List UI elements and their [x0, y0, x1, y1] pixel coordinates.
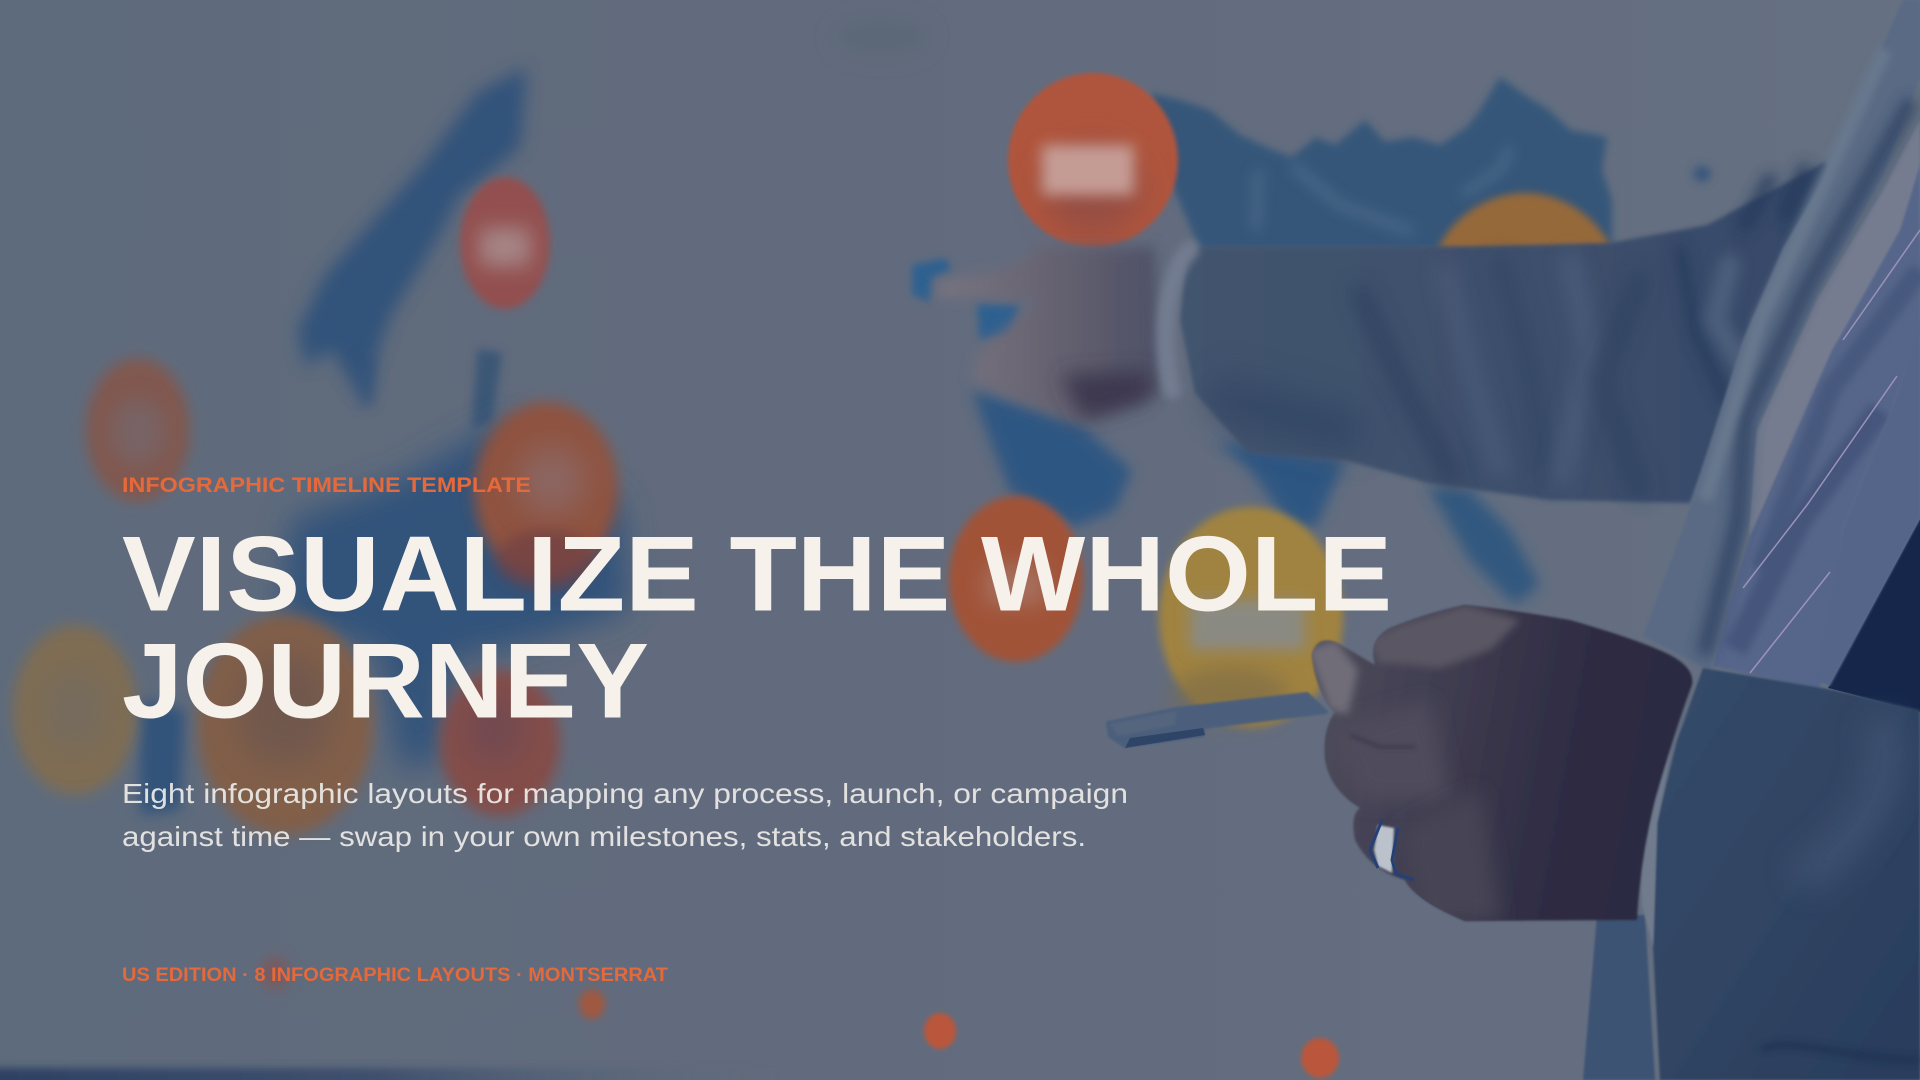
map marker bubbles [13, 73, 1612, 1078]
title: JOURNEY [122, 620, 649, 740]
shirt [1745, 120, 1920, 537]
pointing arm sleeve [1180, 161, 1830, 503]
Asia [1151, 77, 1612, 250]
shirt cuff holding hand [1640, 700, 1695, 947]
holding arm sleeve [1653, 668, 1920, 1080]
description [122, 778, 1128, 852]
pointing hand [938, 247, 1160, 423]
jacket lapel [1643, 0, 1920, 670]
navy jacket interior [1828, 519, 1920, 712]
bottom shadow [0, 1068, 780, 1080]
jacket panel below hand [1583, 915, 1655, 1080]
description: Eight infographic layouts for mapping any process, launch, or campaign [122, 778, 1128, 809]
holding hand [1308, 605, 1692, 921]
right jacket panel [1815, 320, 1920, 686]
shirt cuff [1166, 250, 1190, 390]
wedding ring [1370, 820, 1414, 880]
footer label: US EDITION · 8 INFOGRAPHIC LAYOUTS · MONTSERRAT [122, 965, 668, 986]
title: VISUALIZE THE WHOLE [122, 514, 1392, 634]
eyebrow label: INFOGRAPHIC TIMELINE TEMPLATE [122, 473, 531, 497]
necktie [1713, 165, 1920, 690]
Arabia and India [972, 390, 1132, 527]
world map landmasses [140, 67, 1711, 815]
title [122, 514, 1392, 740]
description: against time — swap in your own milestones, stats, and stakeholders. [122, 821, 1086, 852]
pen [1108, 694, 1326, 748]
